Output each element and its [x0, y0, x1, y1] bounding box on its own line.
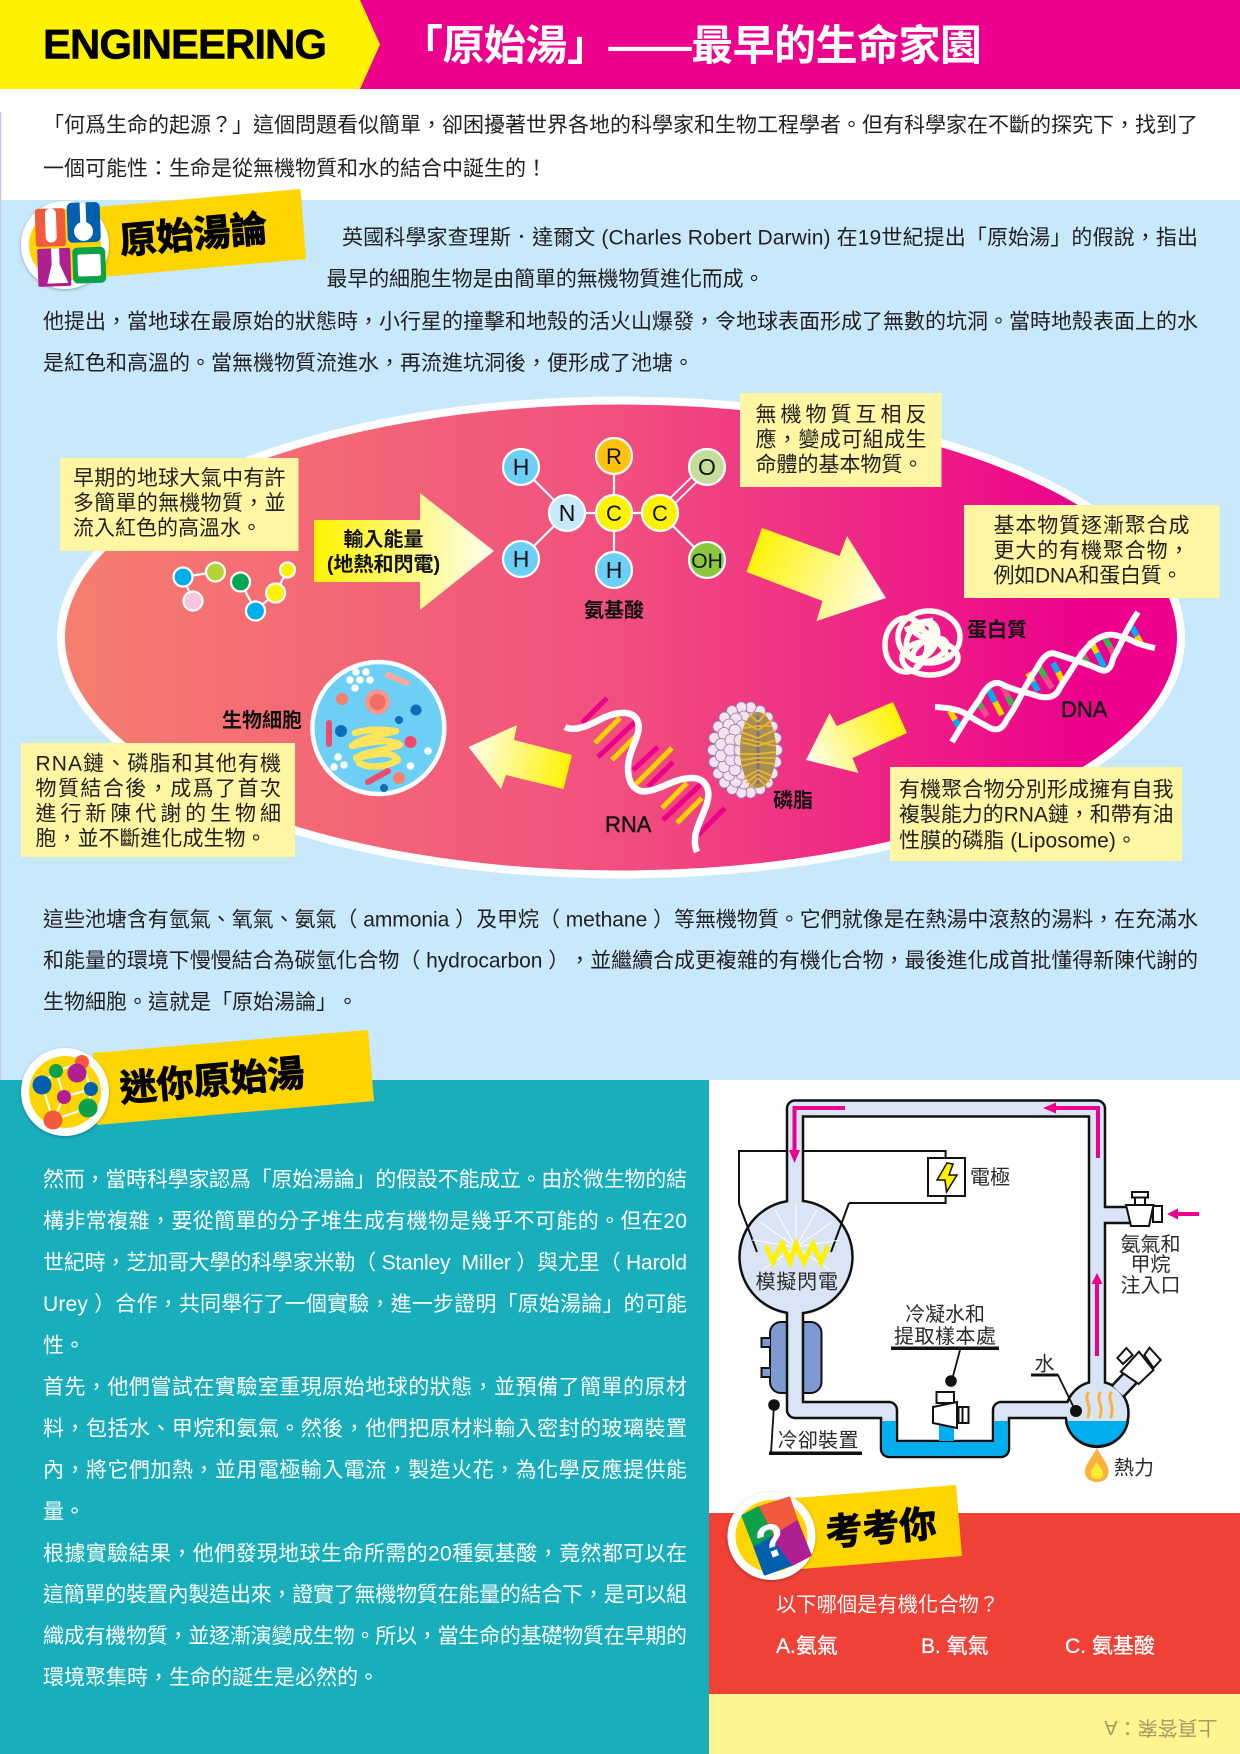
callout: inorganic reaction: 無機物質互相反: [756, 404, 926, 426]
label: condensed water and sampling: 提取樣本處: [894, 1325, 996, 1348]
upside-down answer: 上頁答案：A: [1104, 1716, 1218, 1739]
label: condensed water and sampling: [891, 1303, 999, 1387]
callout: polymers: 例如DNA和蛋白質。: [994, 564, 1182, 588]
header tag: ENGINEERING: ENGINEERING: [43, 20, 327, 68]
mini soup body text: 織成有機物質，並逐漸演變成生物。所以，當生命的基礎物質在早期的: [43, 1625, 687, 1648]
icon: lab glassware: [21, 201, 109, 289]
mini soup body text: 這簡單的裝置內製造出來，證實了無機物質在能量的結合下，是可以組: [43, 1584, 687, 1606]
glass tube: [740, 1108, 1134, 1449]
label: phospholipid: 磷脂: [773, 789, 813, 812]
callout: first cell: 物質結合後，成爲了首次: [36, 778, 281, 800]
mini soup body text: 構非常複雜，要從簡單的分子堆生成有機物是幾乎不可能的。但在20: [43, 1210, 687, 1233]
label: DNA: DNA: [1061, 697, 1108, 722]
amino acid molecule: [503, 438, 725, 622]
theory text: 他提出，當地球在最原始的狀態時，小行星的撞擊和地殼的活火山爆發，令地球表面形成了無數的坑洞。當時地殼表面上的水: [43, 310, 1198, 334]
panel: mini primordial soup teal column: [0, 1080, 709, 1754]
icon: RNA strand: [565, 698, 725, 852]
heat waves: [1087, 1393, 1112, 1417]
diagram: red pond ellipse: [61, 400, 1181, 874]
label: living cell: 生物細胞: [222, 709, 302, 732]
label: water: [1031, 1352, 1082, 1417]
callout: first cell: RNA鏈、磷脂和其他有機: [36, 752, 281, 776]
quiz question: 以下哪個是有機化合物？: [776, 1594, 999, 1616]
mini soup body text: 世紀時，芝加哥大學的科學家米勒（ Stanley Miller ）與尤里（ Harold: [43, 1252, 687, 1274]
callout: inorganic reaction: 應，變成可組成生: [756, 428, 926, 452]
left edge line: [0, 112, 1, 1080]
intro text: 一個可能性：生命是從無機物質和水的結合中誕生的！: [43, 158, 547, 180]
amino acid molecule: H: [606, 557, 622, 583]
quiz heading: 考考你: [824, 1503, 938, 1554]
mini soup body text: 根據實驗結果，他們發現地球生命所需的20種氨基酸，竟然都可以在: [43, 1542, 687, 1566]
small inorganic molecules: [174, 562, 295, 620]
label: heat: 熱力: [1114, 1456, 1154, 1480]
mini soup body text: 量。: [43, 1500, 85, 1524]
water trap: [889, 1421, 1128, 1449]
amino acid molecule: H: [513, 546, 529, 572]
icon: flame: [1085, 1448, 1108, 1482]
panel: primordial soup theory background: [0, 200, 1240, 1080]
icon: DNA double helix: [935, 612, 1155, 742]
label: amino acid: 氨基酸: [584, 598, 644, 622]
mini soup body text: 然而，當時科學家認爲「原始湯論」的假設不能成立。由於微生物的結: [43, 1168, 687, 1192]
icon: liposome: [708, 702, 782, 798]
label: ammonia and methane inlet: 注入口: [1120, 1274, 1180, 1297]
icon: question card: ?: [749, 1511, 794, 1570]
intro text: 「何爲生命的起源？」這個問題看似簡單，卻困擾著世界各地的科學家和生物工程學者。但有科學家在不斷的探究下，找到了: [43, 114, 1198, 137]
arrow: to polymers: [746, 528, 886, 621]
inlet stopcock: [1126, 1192, 1162, 1226]
amino acid molecule: R: [606, 444, 622, 469]
icon: living cell: [312, 662, 444, 794]
label: simulated lightning: 模擬閃電: [756, 1270, 838, 1294]
amino acid molecule: C: [652, 501, 668, 526]
label: ammonia and methane inlet: [1120, 1233, 1180, 1297]
amino acid molecule: O: [698, 454, 716, 480]
section heading: 迷你原始湯: 迷你原始湯: [118, 1053, 306, 1109]
theory conclusion text: 和能量的環境下慢慢結合為碳氫化合物（ hydrocarbon ），並繼續合成更複雜的有機化合物，最後進化成首批懂得新陳代謝的: [43, 950, 1198, 972]
callout: polymers: 基本物質逐漸聚合成: [994, 514, 1190, 538]
section heading: 迷你原始湯: [21, 1030, 374, 1136]
callout: RNA and liposome: 有機聚合物分別形成擁有自我: [899, 778, 1174, 802]
icon: protein scribble: [885, 611, 960, 675]
amino acid molecule: N: [559, 500, 575, 526]
callout: inorganic reaction: [740, 393, 942, 487]
mini soup body text: 環境聚集時，生命的誕生是必然的。: [43, 1666, 379, 1690]
panel: answer strip: [709, 1694, 1240, 1754]
callout: early atmosphere: 流入紅色的高溫水。: [73, 517, 262, 540]
callout: polymers: [964, 505, 1220, 598]
mini soup body text: 內，將它們加熱，並用電極輸入電流，製造火花，為化學反應提供能: [43, 1458, 687, 1482]
section heading: 原始湯論: 原始湯論: [118, 208, 269, 262]
quiz options: A.氨氣: [776, 1635, 838, 1658]
arrow: energy input: [314, 493, 494, 610]
label: cooling device: [768, 1399, 862, 1455]
intro text: [43, 114, 1198, 180]
callout: first cell: 胞，並不斷進化成生物。: [36, 828, 266, 850]
callout: early atmosphere: 早期的地球大氣中有許: [73, 467, 286, 490]
arrow: energy input: (地熱和閃電): [327, 553, 440, 576]
right flask stopcock: [1117, 1348, 1161, 1384]
title: 「原始湯」——最早的生命家園: [401, 22, 982, 69]
mini soup body text: 料，包括水、甲烷和氨氣。然後，他們把原材料輸入密封的玻璃裝置: [43, 1418, 687, 1440]
arrow: to liposome: [806, 702, 907, 773]
theory conclusion text: 生物細胞。這就是「原始湯論」。: [43, 991, 358, 1014]
icon: question card: [728, 1492, 816, 1580]
quiz options: B. 氧氣: [921, 1635, 989, 1658]
icon: molecule network: [21, 1048, 109, 1136]
amino acid molecule: OH: [691, 550, 723, 573]
theory conclusion text: [43, 908, 1198, 1014]
theory conclusion text: 這些池塘含有氫氣、氧氣、氨氣（ ammonia ）及甲烷（ methane ）等無機物質。它們就像是在熱湯中滾熬的湯料，在充滿水: [43, 908, 1198, 932]
label: water: 水: [1034, 1352, 1054, 1376]
label: ammonia and methane inlet: 氨氣和: [1120, 1233, 1180, 1256]
label: ammonia and methane inlet: 甲烷: [1130, 1253, 1170, 1276]
amino acid molecule: C: [606, 501, 622, 526]
section heading: 原始湯論: [21, 189, 306, 289]
label: RNA: RNA: [605, 812, 652, 837]
mini soup body text: 性。: [43, 1334, 85, 1358]
callout: RNA and liposome: 性膜的磷脂 (Liposome)。: [899, 830, 1137, 852]
arrow: energy input: 輸入能量: [344, 528, 424, 551]
quiz options: C. 氨基酸: [1065, 1635, 1155, 1658]
mini soup body text: [43, 1168, 687, 1690]
electrode wires (upper): [739, 1151, 946, 1204]
label: cooling device: 冷卻裝置: [778, 1429, 858, 1452]
header banner: [0, 0, 1240, 89]
callout: inorganic reaction: 命體的基本物質。: [756, 454, 924, 476]
callout: RNA and liposome: 複製能力的RNA鏈，和帶有油: [899, 804, 1174, 826]
label: electrode: 電極: [970, 1166, 1010, 1189]
theory text: 英國科學家查理斯．達爾文 (Charles Robert Darwin) 在19世紀提出「原始湯」的假說，指出: [342, 226, 1198, 250]
electrode box: [928, 1158, 965, 1196]
arrow: to living cell: [468, 725, 572, 789]
electrode wires inside flask: [739, 1203, 849, 1252]
theory text: 是紅色和高溫的。當無機物質流進水，再流進坑洞後，便形成了池塘。: [43, 352, 694, 375]
label: protein: 蛋白質: [967, 618, 1027, 642]
cooling jacket: [762, 1322, 822, 1393]
theory text: [43, 226, 1198, 375]
callout: first cell: 進行新陳代謝的生物細: [36, 802, 281, 826]
mini soup body text: Urey ）合作，共同舉行了一個實驗，進一步證明「原始湯論」的可能: [43, 1293, 687, 1316]
callout: RNA and liposome: [890, 767, 1182, 861]
diagram: Miller-Urey apparatus: [739, 1102, 1199, 1482]
sampling stopcock: [933, 1392, 968, 1428]
quiz options: [776, 1635, 1155, 1658]
label: condensed water and sampling: 冷凝水和: [905, 1303, 985, 1326]
simulated lightning: [752, 1204, 840, 1270]
amino acid molecule: H: [513, 454, 529, 480]
callout: first cell: [21, 743, 295, 857]
callout: early atmosphere: [60, 458, 298, 551]
flow arrows: [789, 1102, 1199, 1356]
theory text: 最早的細胞生物是由簡單的無機物質進化而成。: [326, 268, 764, 291]
panel: quiz: [709, 1485, 1240, 1694]
callout: early atmosphere: 多簡單的無機物質，並: [73, 492, 286, 515]
quiz heading: [794, 1485, 962, 1569]
callout: polymers: 更大的有機聚合物，: [994, 540, 1190, 562]
mini soup body text: 首先，他們嘗試在實驗室重現原始地球的狀態，並預備了簡單的原材: [43, 1376, 687, 1399]
